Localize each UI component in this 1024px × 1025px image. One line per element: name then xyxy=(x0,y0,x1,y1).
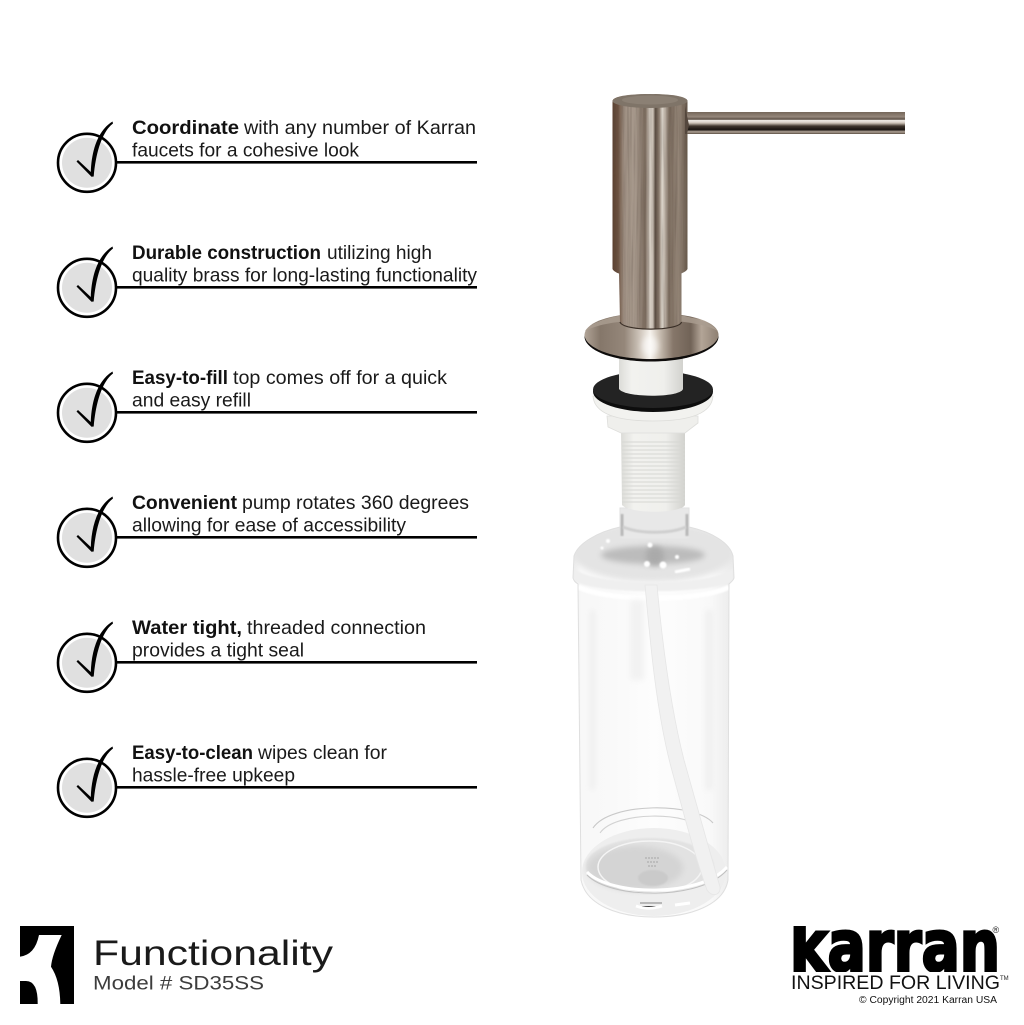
text block: provides a tight seal xyxy=(132,639,304,661)
text block: quality brass for long-lasting functionality xyxy=(132,264,477,286)
text block: allowing for ease of accessibility xyxy=(132,514,406,536)
rule xyxy=(116,786,477,789)
text block: Durable construction xyxy=(132,242,321,264)
icon: checkmark in circle xyxy=(58,122,116,192)
text block xyxy=(132,492,469,536)
bottle shoulder xyxy=(575,508,730,594)
text block: Water tight, xyxy=(132,617,242,639)
bottle base xyxy=(582,808,727,916)
feature: durable construction xyxy=(58,242,477,317)
icon: checkmark in circle xyxy=(58,496,116,567)
icon: checkmark in circle xyxy=(58,246,116,317)
tagline: INSPIRED FOR LIVING xyxy=(791,972,1000,994)
text block: faucets for a cohesive look xyxy=(132,139,359,161)
text block: Coordinate xyxy=(132,117,239,139)
threaded shank xyxy=(593,396,713,512)
icon: checkmark in circle xyxy=(58,622,116,692)
feature: convenient xyxy=(58,492,477,567)
title: Functionality xyxy=(93,934,334,973)
text block: Easy-to-fill xyxy=(132,367,228,389)
flange xyxy=(584,313,718,362)
text block xyxy=(132,617,426,661)
white flange xyxy=(593,396,713,421)
feature: easy-to-clean xyxy=(58,742,477,817)
icon: checkmark in circle xyxy=(58,372,116,442)
text block: and easy refill xyxy=(132,389,251,411)
lower neck xyxy=(619,270,682,329)
rule xyxy=(116,411,477,414)
white neck xyxy=(619,354,683,396)
registered mark: ® xyxy=(992,925,1000,935)
rule xyxy=(116,286,477,289)
product photo: soap dispenser xyxy=(571,94,905,917)
trademark: TM xyxy=(1000,976,1009,982)
feature: water tight xyxy=(58,617,477,692)
rule xyxy=(116,661,477,664)
hex nut xyxy=(607,416,698,433)
feature: easy-to-fill xyxy=(58,367,477,442)
feature: coordinate xyxy=(58,117,477,192)
brand logo: karran xyxy=(792,926,1008,1005)
spout xyxy=(685,106,905,134)
text block xyxy=(132,117,476,161)
bottle body streaks xyxy=(634,602,641,677)
rule xyxy=(116,161,477,164)
text block xyxy=(132,367,447,411)
brand mark: R logo xyxy=(20,926,74,1004)
text block: Convenient xyxy=(132,492,238,514)
text block xyxy=(132,742,388,786)
rule xyxy=(116,536,477,539)
text block: hassle-free upkeep xyxy=(132,764,295,786)
text block: threaded connection xyxy=(247,617,426,639)
text block: utilizing high xyxy=(327,242,432,264)
black washer xyxy=(593,371,713,412)
bottle xyxy=(571,508,735,917)
model number: Model # SD35SS xyxy=(93,972,264,994)
text block: Easy-to-clean xyxy=(132,742,253,764)
icon: checkmark in circle xyxy=(58,746,116,817)
text block: wipes clean for xyxy=(257,742,388,764)
pump head xyxy=(612,94,688,278)
dip tube xyxy=(645,585,720,895)
text block: pump rotates 360 degrees xyxy=(242,492,469,514)
text block: with any number of Karran xyxy=(243,117,476,139)
text block: top comes off for a quick xyxy=(233,367,447,389)
copyright: © Copyright 2021 Karran USA xyxy=(859,995,997,1006)
text block xyxy=(132,242,477,286)
